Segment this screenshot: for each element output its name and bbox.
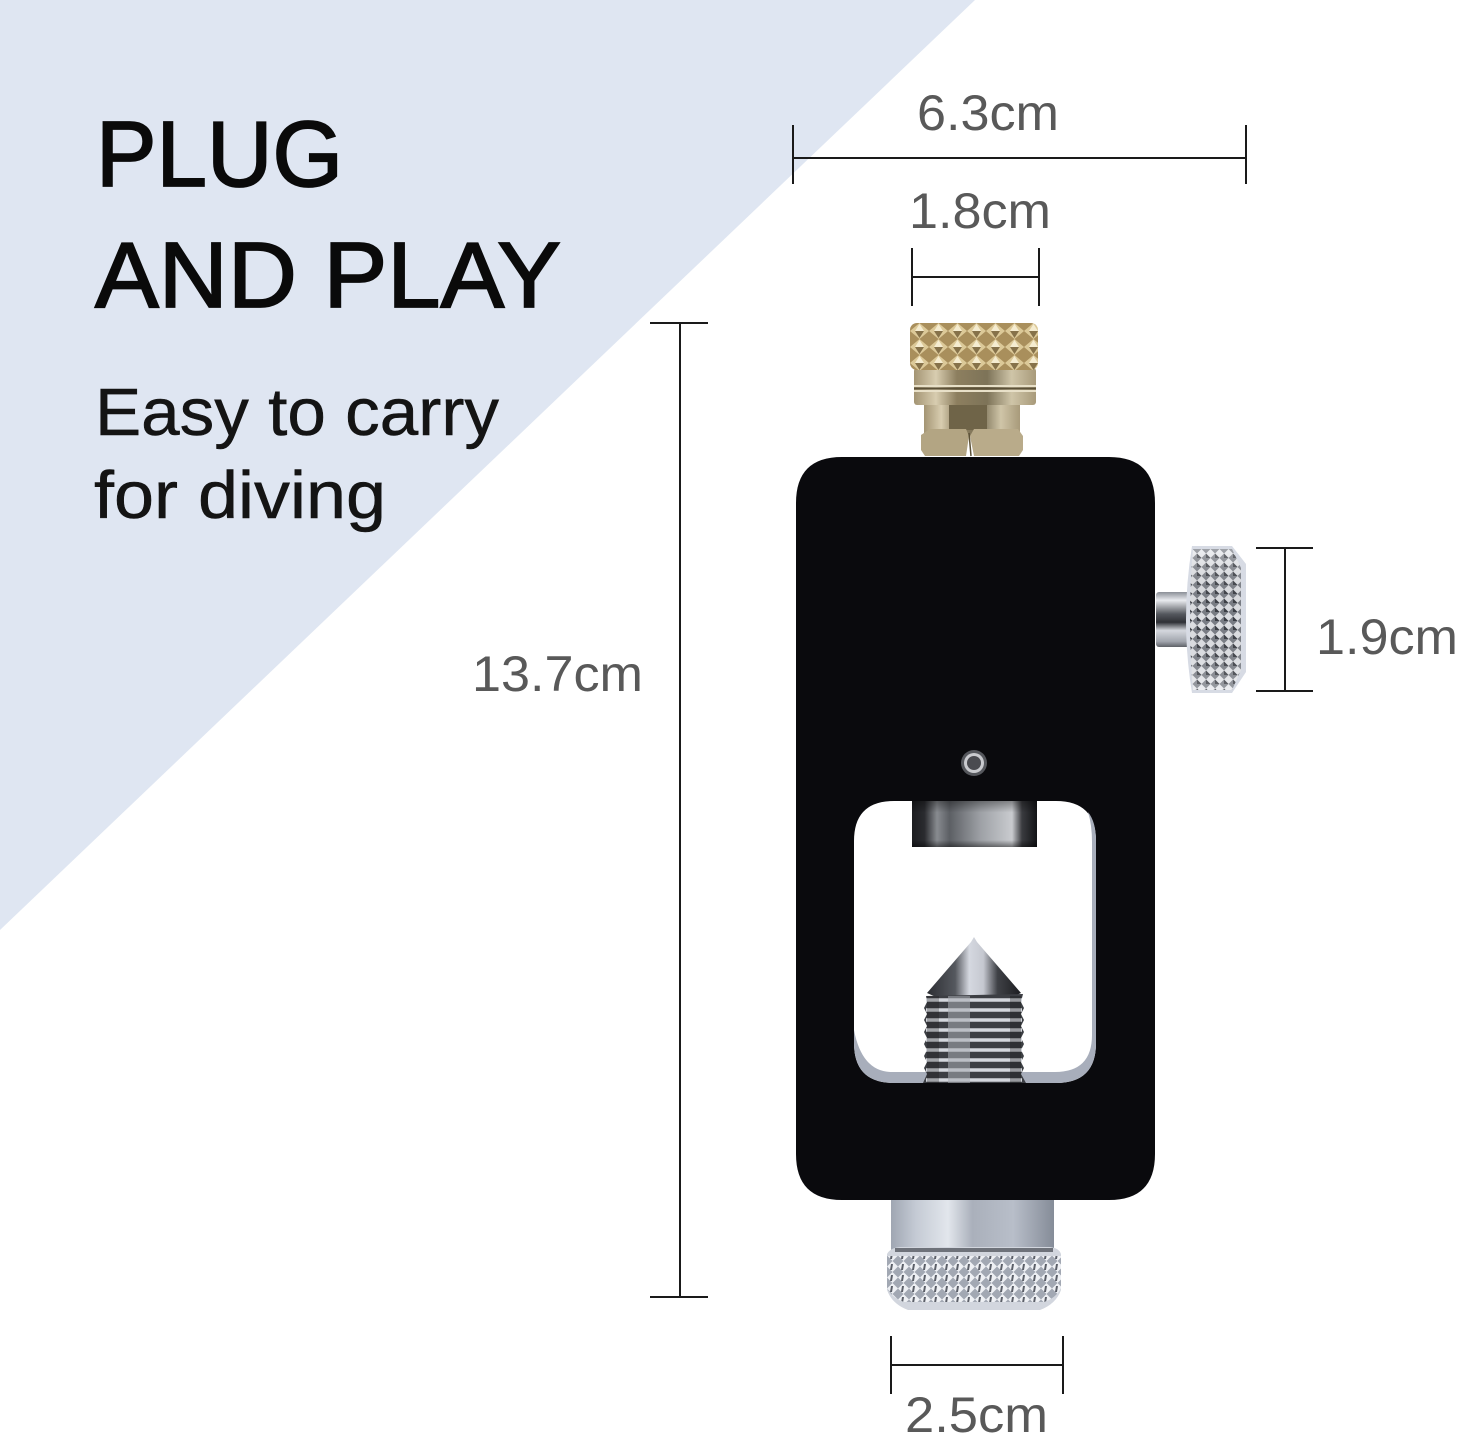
text block: easy to carry for diving: for diving <box>94 458 386 533</box>
dimension: bottom knob 2.5cm <box>891 1336 1063 1436</box>
dimension: height 13.7cm: 13.7cm <box>472 646 643 702</box>
dimension: overall width 6.3cm: 6.3cm <box>917 85 1059 141</box>
dimension: brass knob width 1.8cm <box>909 183 1051 306</box>
dimension: height 13.7cm <box>472 323 708 1297</box>
heading: plug and play <box>95 102 561 327</box>
icon: lower cone screw <box>923 937 1026 1083</box>
heading: plug and play: PLUG <box>96 102 343 206</box>
dimension: side knob 1.9cm <box>1256 548 1458 691</box>
icon: window inner bevel <box>854 812 1096 1083</box>
icon: brass top fitting <box>910 323 1038 456</box>
text block: easy to carry for diving <box>94 375 500 533</box>
icon: bottom silver cylinder and knurled nut <box>887 1198 1061 1310</box>
heading: plug and play: AND PLAY <box>95 223 561 327</box>
dimension: overall width 6.3cm <box>793 85 1246 184</box>
icon: side knurled knob <box>1156 546 1246 693</box>
icon: set screw <box>961 750 987 776</box>
panel: blue diagonal triangle <box>0 0 975 930</box>
icon: upper steel pin <box>912 801 1037 847</box>
dimension: side knob 1.9cm: 1.9cm <box>1316 609 1458 665</box>
text block: easy to carry for diving: Easy to carry <box>95 375 500 450</box>
icon: black adapter body <box>796 457 1155 1200</box>
dimension: brass knob width 1.8cm: 1.8cm <box>909 183 1051 239</box>
